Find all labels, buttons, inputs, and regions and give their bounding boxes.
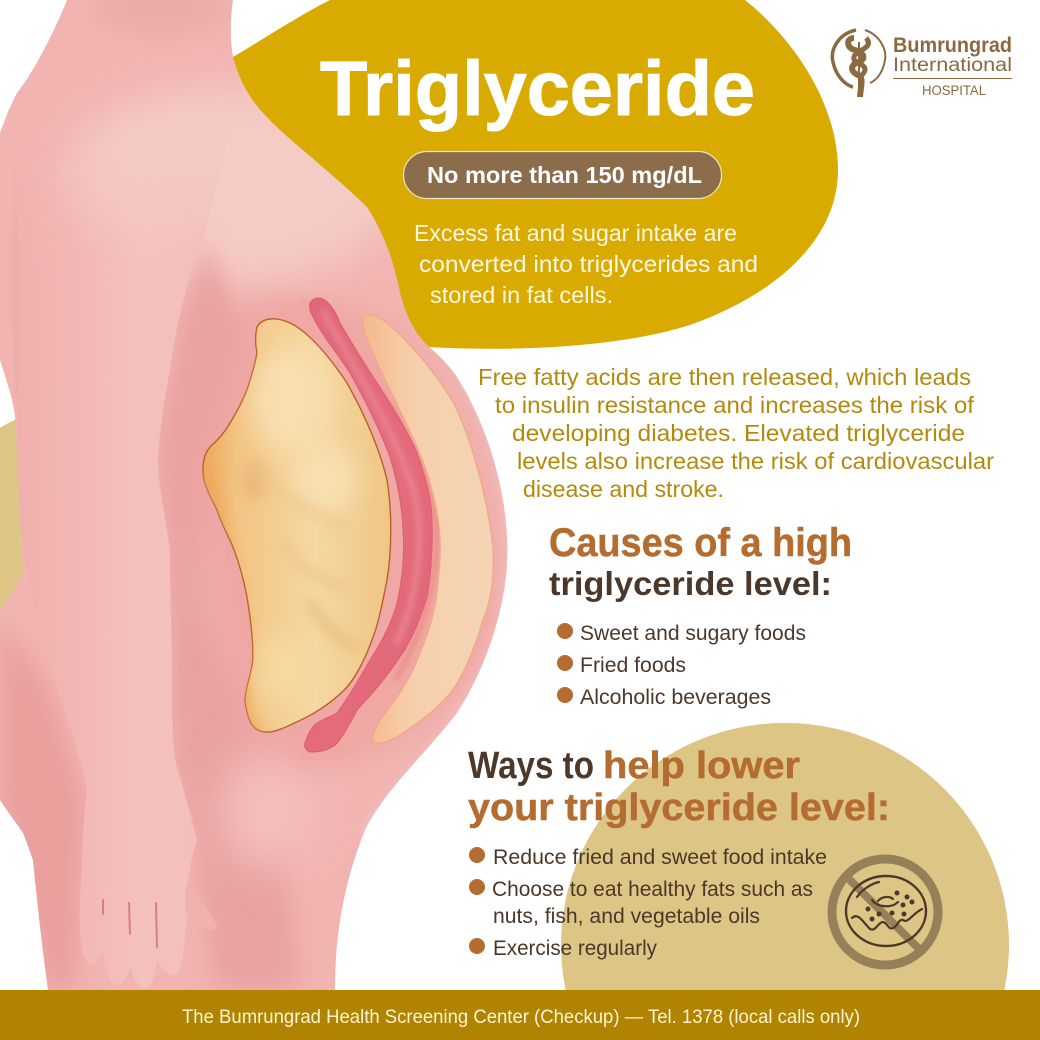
list: ways to lower: Choose to eat healthy fats such as [492,878,813,901]
list: ways to lower [469,846,827,960]
heading: causes: Causes of a high [549,521,852,565]
body silhouette [0,0,507,990]
heading: ways to lower: Ways to [468,745,594,787]
intro text: Excess fat and sugar intake are [414,220,737,246]
explanation text: disease and stroke. [523,476,724,502]
muscle highlight [322,310,419,645]
intro text: converted into triglycerides and [419,251,758,277]
list: causes [557,622,806,709]
body shading [0,0,530,990]
finger separations [103,900,157,947]
explanation text: developing diabetes. Elevated triglyceride [512,420,965,446]
illustration: body with abdominal fat cross-section [0,0,530,990]
arm [18,274,217,988]
red muscle layer [305,298,432,752]
intro text [414,220,758,308]
footer bar [0,990,1040,1040]
thumb [185,884,217,930]
background circle: lower right [561,723,1009,1000]
gold header blob [200,0,838,349]
logo: Bumrungrad International Hospital: Bumrungrad [893,34,1012,57]
explanation text: levels also increase the risk of cardiovascular [517,448,994,474]
footer bar: The Bumrungrad Health Screening Center (Checkup) — Tel. 1378 (local calls only) [182,1006,860,1028]
heading: causes [549,521,852,602]
logo: Bumrungrad International Hospital: HOSPITAL [922,82,986,98]
pill: target level: No more than 150 mg/dL [427,162,702,188]
background circle: left [0,410,170,630]
intro text: stored in fat cells. [430,282,613,308]
icon: crossed-out donut [832,859,938,965]
heading: ways to lower: your triglyceride level: [468,787,890,829]
logo: Bumrungrad International Hospital: International [893,55,1012,76]
heading: ways to lower: help lower [603,745,800,787]
peach outer fat layer [362,315,493,743]
heading: ways to lower [468,745,890,829]
logo emblem [832,30,885,97]
list: ways to lower: Reduce fried and sweet food intake [493,846,827,869]
arm crease [15,215,17,400]
explanation text [478,364,994,502]
title: Triglyceride [320,46,755,132]
explanation text: to insulin resistance and increases the risk of [495,392,975,418]
pill: target level [404,152,722,198]
list: ways to lower: nuts, fish, and vegetable oils [493,905,760,928]
list: causes: Alcoholic beverages [580,686,771,709]
list: ways to lower: Exercise regularly [493,937,657,960]
membrane around muscle [290,298,440,760]
list: causes: Fried foods [580,654,686,677]
logo: Bumrungrad International Hospital [832,30,1012,98]
muscle glow [340,340,437,680]
explanation text: Free fatty acids are then released, which leads [478,364,971,390]
list: causes: Sweet and sugary foods [580,622,806,645]
yellow inner fat [195,319,391,740]
heading: causes: triglyceride level: [549,565,832,602]
